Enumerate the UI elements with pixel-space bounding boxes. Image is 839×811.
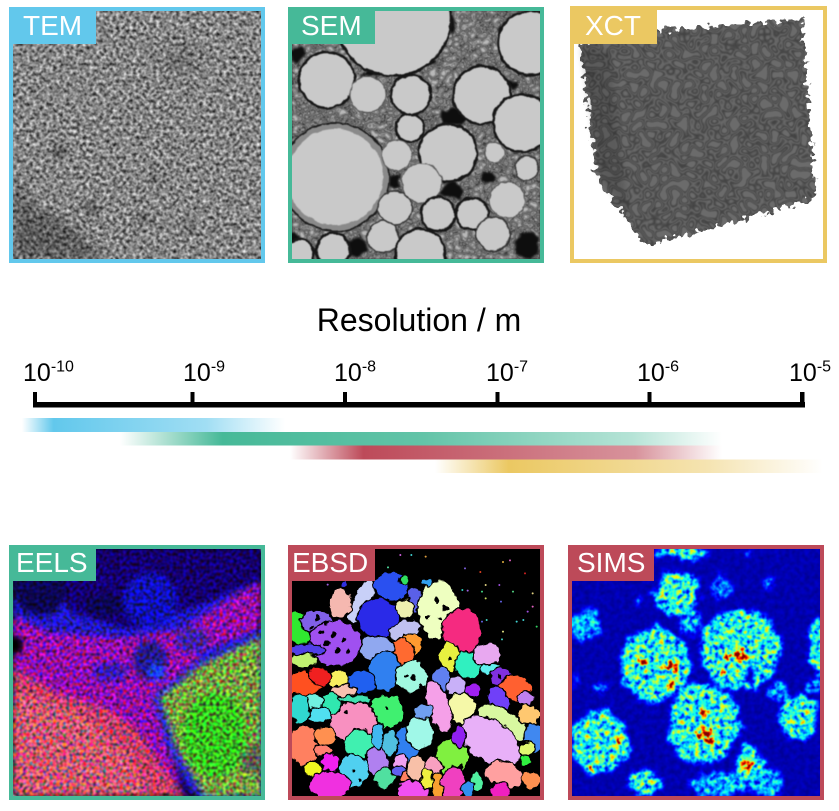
SEM large particles	[292, 11, 540, 259]
resolution range bars	[22, 418, 823, 473]
tick label 10^-5: 10	[789, 359, 817, 387]
panel: EELS	[5, 545, 269, 798]
tick label 10^-9: 10	[183, 359, 211, 387]
EBSD grain map	[281, 548, 544, 801]
tick label 10^-7: 10	[486, 359, 514, 387]
tick label 10^-8: 10	[334, 359, 362, 387]
tick label 10^-7: -7	[514, 358, 528, 376]
TEM label	[9, 7, 96, 44]
TEM range bar	[22, 418, 285, 432]
panel: XCT	[570, 6, 825, 261]
EELS frame	[11, 547, 263, 798]
SEM dark pores	[288, 14, 540, 259]
TEM label: TEM	[23, 10, 82, 41]
XCT rendered volume	[580, 20, 815, 246]
EBSD stray pixels	[327, 554, 538, 640]
tick label 10^-5: -5	[817, 358, 831, 376]
panel: TEM	[9, 7, 263, 261]
resolution axis	[23, 358, 831, 408]
SEM frame	[290, 9, 542, 261]
EELS label: EELS	[16, 547, 88, 578]
EELS composite map	[5, 548, 269, 796]
tick label 10^-6: -6	[665, 358, 679, 376]
XCT label	[570, 6, 657, 44]
tick label 10^-10: 10	[23, 359, 51, 387]
panel: EBSD	[281, 545, 544, 801]
SIMS frame	[570, 547, 822, 798]
SEM label: SEM	[301, 10, 362, 41]
SEM range bar	[120, 432, 722, 446]
XCT frame	[572, 8, 825, 261]
XCT label: XCT	[585, 10, 641, 41]
SEM micrograph	[292, 11, 540, 259]
tick label 10^-8: -8	[362, 358, 376, 376]
panel: SIMS	[568, 545, 824, 800]
EBSD frame	[290, 547, 542, 798]
tick label 10^-6: 10	[637, 359, 665, 387]
EBSD and SIMS range bar	[290, 446, 722, 460]
SEM label	[288, 7, 375, 44]
TEM frame	[11, 9, 263, 261]
tick label 10^-9: -9	[211, 358, 225, 376]
SIMS label: SIMS	[577, 547, 645, 578]
SIMS label	[568, 545, 654, 581]
axis line and ticks	[33, 392, 805, 408]
EBSD label: EBSD	[292, 547, 368, 578]
panel: SEM	[288, 7, 544, 263]
tick label 10^-10: -10	[51, 358, 74, 376]
SEM crackly particles	[292, 11, 540, 259]
SIMS intensity map	[572, 549, 820, 796]
XCT range bar	[435, 460, 823, 473]
axis title: Resolution / m	[317, 302, 521, 338]
TEM micrograph	[13, 11, 261, 259]
